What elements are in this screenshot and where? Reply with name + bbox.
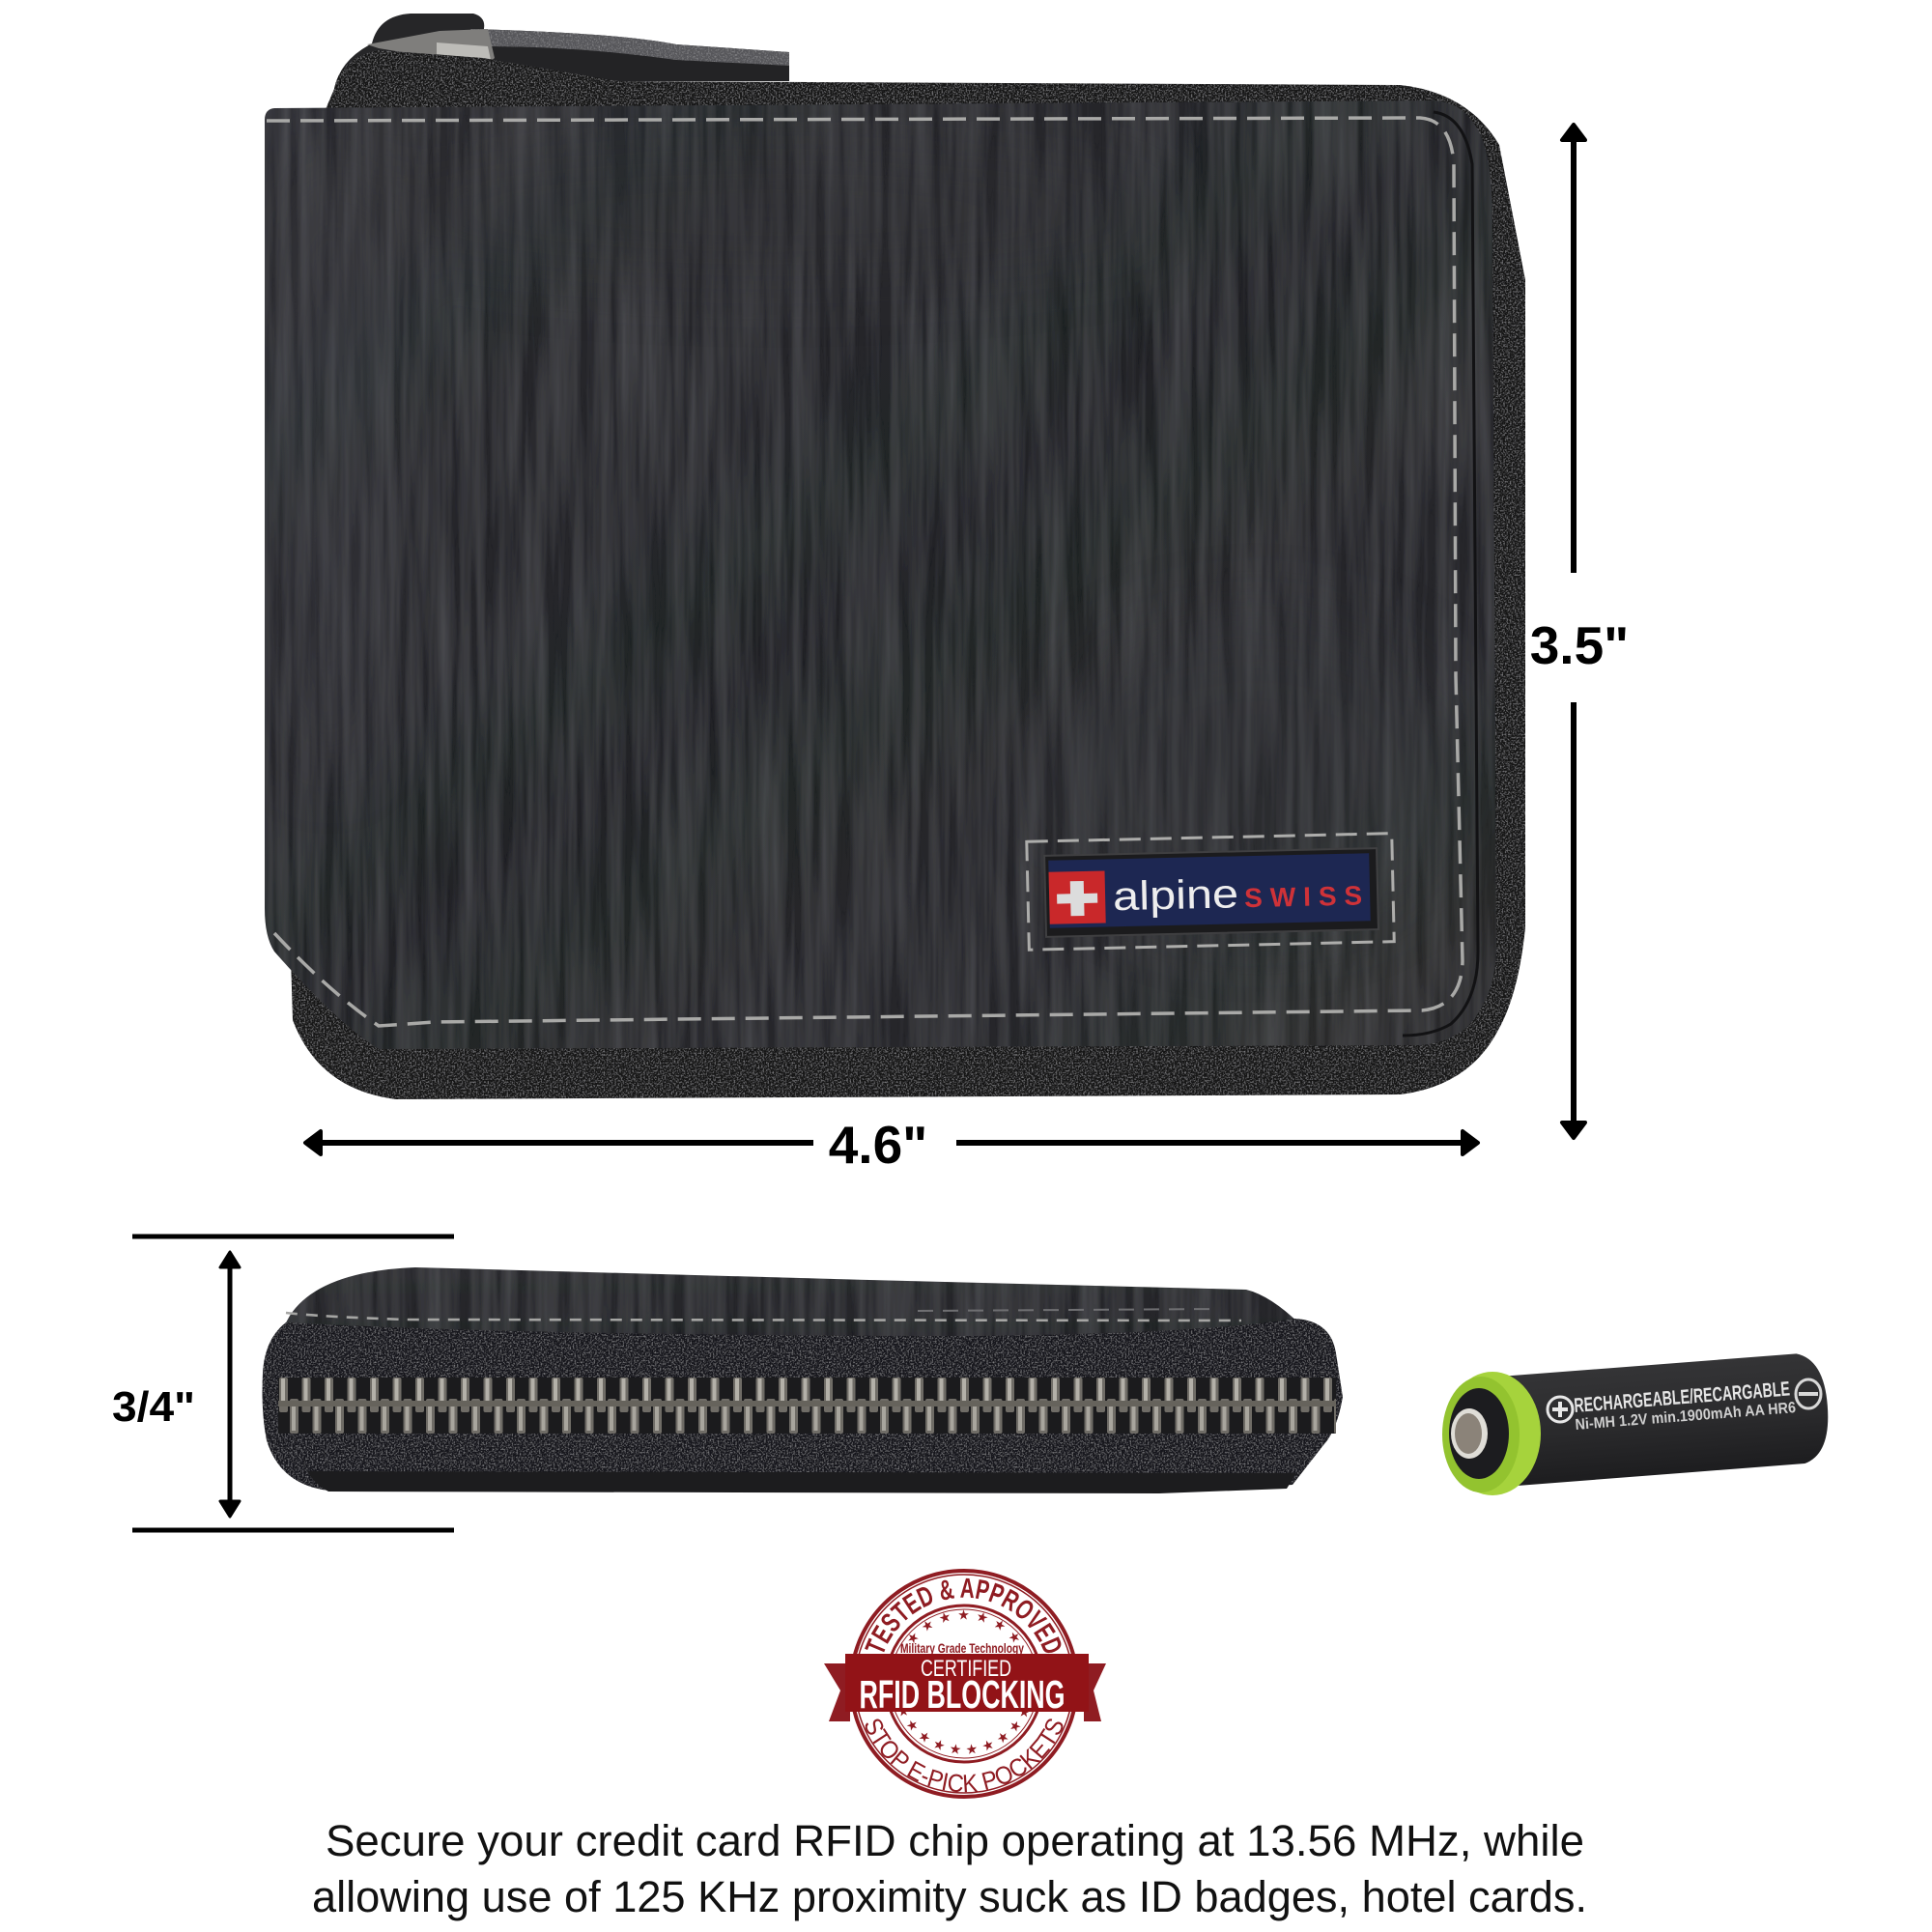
zipper pull [334, 14, 789, 89]
battery: Ni-MH 1.2V min.1900mAh AA HR6 [1575, 1400, 1797, 1434]
bottom leather edge [307, 1471, 1296, 1493]
leather front panel [265, 100, 1496, 1049]
thickness label: 3/4" [112, 1383, 195, 1431]
width arrow [305, 1131, 1478, 1154]
top arc text: TESTED & APPROVED [865, 1578, 1061, 1654]
brand label [1027, 834, 1394, 950]
minus symbol [1796, 1379, 1821, 1408]
military grade text: Military Grade Technology [900, 1640, 1024, 1656]
RFID description line one: Secure your credit card RFID chip operating at 13.56 MHz, while [326, 1816, 1584, 1865]
zipper band [290, 50, 1525, 1099]
height label: 3.5" [1530, 615, 1629, 675]
wallet front view [265, 14, 1525, 1099]
zipper teeth [278, 1378, 1336, 1434]
top leather [274, 1267, 1300, 1344]
height arrow [1562, 125, 1585, 1138]
panel embossed edge [1403, 112, 1478, 1036]
zipper tape body [263, 1319, 1343, 1492]
RFID description line two: allowing use of 125 KHz proximity suck as ID badges, hotel cards. [312, 1872, 1587, 1921]
bottom arc text: STOP E-PICK POCKETS [866, 1719, 1063, 1793]
brand name: alpine [1113, 870, 1239, 919]
debossed logo stitches [918, 1309, 1219, 1311]
green end cap [1444, 1372, 1541, 1495]
bottom stars: ★ ★ ★ ★ ★ ★ ★ ★ ★ ★ [900, 1712, 1029, 1754]
positive terminal [1451, 1408, 1488, 1459]
swiss flag mark [1049, 870, 1106, 924]
outer rings [851, 1571, 1077, 1797]
ribbon tails [824, 1663, 1106, 1721]
battery body [1486, 1351, 1832, 1488]
battery text: RECHARGEABLE/RECARGABLE [1574, 1378, 1791, 1417]
certified text: CERTIFIED [921, 1656, 1011, 1682]
thickness guide lines and arrow [132, 1236, 454, 1530]
top stars: ★ ★ ★ ★ ★ ★ ★ [908, 1609, 1019, 1644]
battery [1442, 1351, 1832, 1495]
RFID certification badge [824, 1569, 1106, 1799]
navy woven label [1048, 853, 1371, 928]
ribbon [845, 1654, 1089, 1712]
side stitching [286, 1313, 1241, 1321]
RFID blocking text: RFID BLOCKING [860, 1672, 1065, 1717]
stitching [267, 118, 1463, 1026]
label stitching [1027, 834, 1394, 950]
plus symbol [1548, 1397, 1573, 1422]
dark recess [1449, 1388, 1509, 1479]
leather highlight patches [296, 256, 359, 673]
wallet side view [263, 1267, 1343, 1493]
width label: 4.6" [829, 1115, 927, 1175]
brand label: SWISS [1244, 880, 1363, 913]
